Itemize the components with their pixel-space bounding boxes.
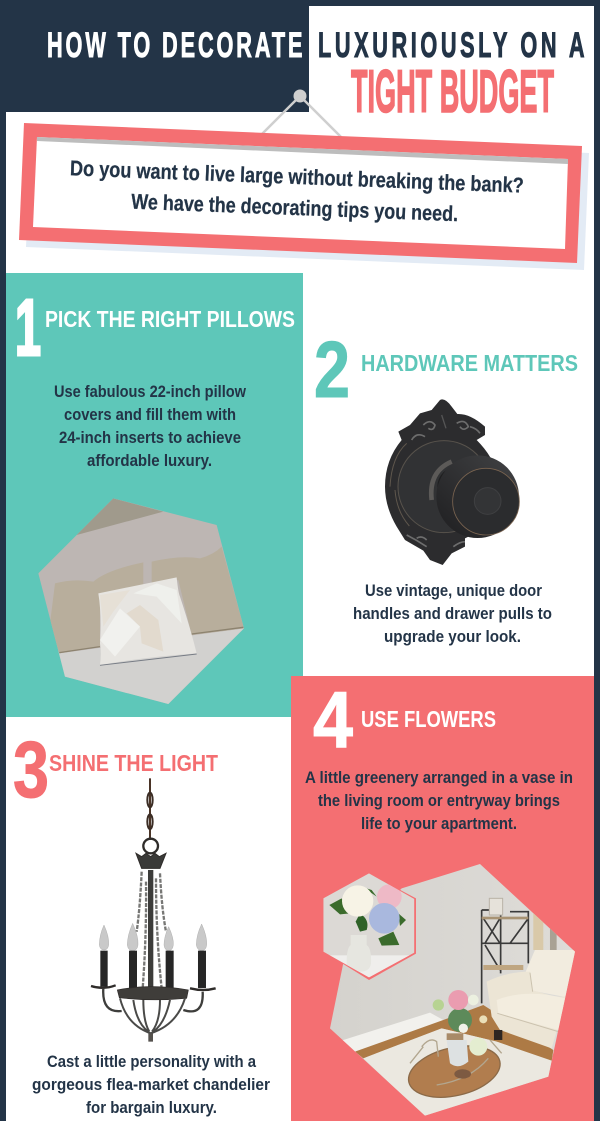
body 1: 24-inch inserts to achieve bbox=[59, 428, 241, 447]
title line: luxuriously on a: LUXURIOUSLY ON A bbox=[318, 27, 585, 65]
photo: hydrangea vase bbox=[323, 874, 416, 980]
intro sign bbox=[19, 123, 589, 270]
sign text: Do you want to live large without breaking the bank? bbox=[70, 156, 524, 198]
heading 3: SHINE THE LIGHT bbox=[49, 750, 219, 776]
sign text: We have the decorating tips you need. bbox=[131, 190, 459, 226]
body 3 bbox=[32, 1052, 270, 1117]
body 2: handles and drawer pulls to bbox=[353, 604, 552, 623]
panel 2: hardware bbox=[314, 325, 578, 646]
body 4: A little greenery arranged in a vase in bbox=[305, 768, 573, 787]
hanging rope and peg bbox=[262, 90, 341, 137]
title bbox=[47, 27, 585, 125]
body 3: for bargain luxury. bbox=[86, 1098, 217, 1117]
body 2 bbox=[353, 581, 552, 646]
icon: door knob bbox=[385, 399, 519, 565]
number 4: 4 bbox=[313, 675, 353, 764]
body 4 bbox=[305, 768, 573, 833]
tray bbox=[408, 1045, 501, 1098]
number 2: 2 bbox=[314, 325, 350, 414]
number 3: 3 bbox=[13, 725, 49, 814]
white title block bbox=[309, 6, 594, 113]
body 2: upgrade your look. bbox=[384, 627, 521, 646]
shelf bbox=[482, 909, 528, 1003]
body 3: Cast a little personality with a bbox=[47, 1052, 256, 1071]
body 1: Use fabulous 22-inch pillow bbox=[54, 382, 247, 401]
panel 1: pillows bbox=[6, 273, 303, 717]
panel 3: light bbox=[13, 725, 270, 1117]
armchair bbox=[525, 950, 577, 997]
sign text bbox=[68, 156, 524, 229]
photo: pillows on sofa bbox=[38, 498, 244, 704]
heading 1: PICK THE RIGHT PILLOWS bbox=[45, 306, 295, 332]
body 2: Use vintage, unique door bbox=[365, 581, 542, 600]
title line: how to decorate: HOW TO DECORATE bbox=[47, 27, 302, 65]
body 1 bbox=[54, 382, 247, 470]
bouquet bbox=[448, 1008, 472, 1032]
heading 4: USE FLOWERS bbox=[361, 706, 496, 732]
number 1: 1 bbox=[15, 283, 41, 372]
panel 4: flowers bbox=[291, 675, 594, 1121]
body 1: affordable luxury. bbox=[87, 451, 212, 470]
body 4: the living room or entryway brings bbox=[318, 791, 560, 810]
body 3: gorgeous flea-market chandelier bbox=[32, 1075, 270, 1094]
photo: living room bbox=[323, 860, 580, 1120]
body 4: life to your apartment. bbox=[361, 814, 517, 833]
icon: chandelier bbox=[91, 778, 216, 1042]
body 1: covers and fill them with bbox=[64, 405, 236, 424]
